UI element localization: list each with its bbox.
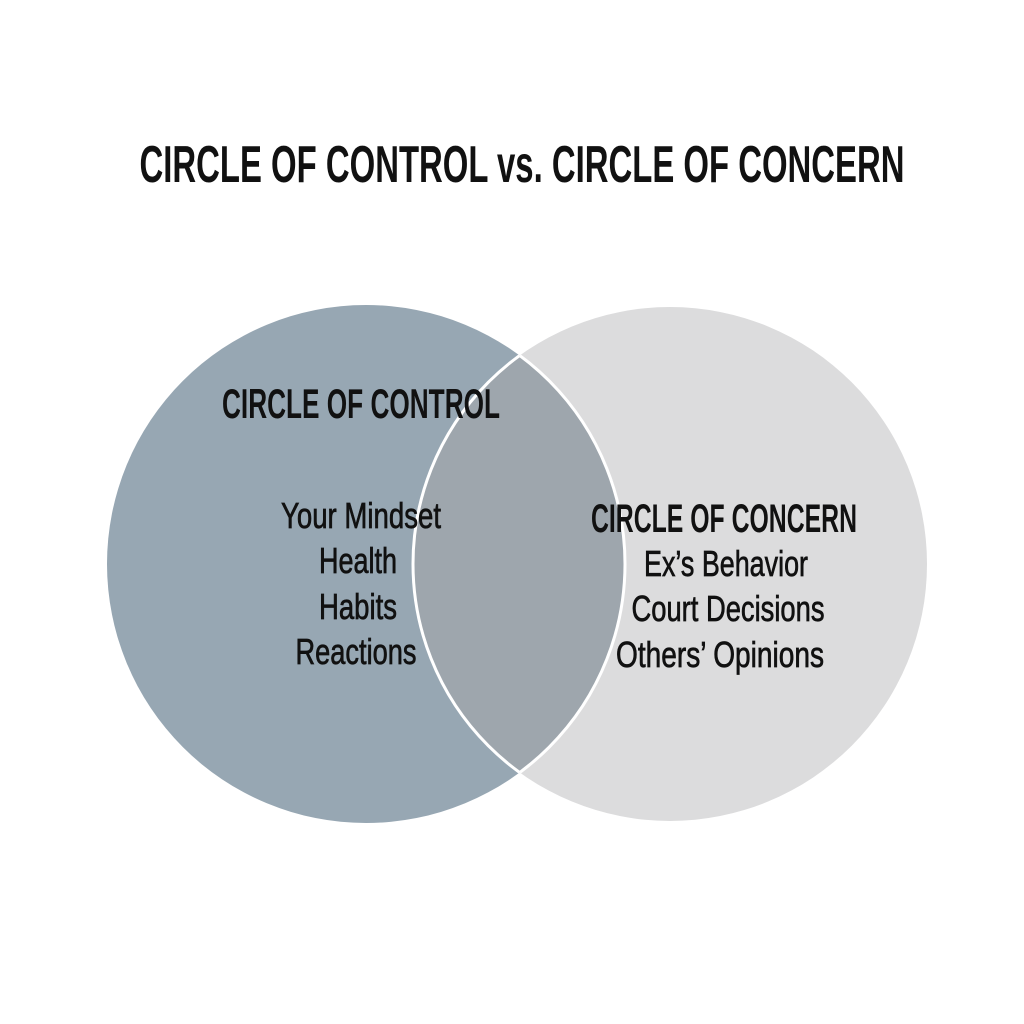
venn diagram [107, 305, 927, 823]
list: concern items: Court Decisions [632, 588, 824, 629]
list: control items: Reactions [296, 631, 416, 672]
list: concern items: Ex’s Behavior [644, 543, 808, 584]
circle: concern [413, 307, 927, 821]
list: concern items: Others’ Opinions [616, 634, 824, 675]
circle: control [107, 305, 625, 823]
overlap area [414, 358, 624, 770]
list: control items: Health [319, 540, 397, 581]
list: control items: Your Mindset [281, 495, 441, 536]
list: control items: Habits [319, 586, 397, 627]
list: control items [281, 495, 441, 672]
label: circle of control: CIRCLE OF CONTROL [222, 380, 500, 427]
label: circle of concern: CIRCLE OF CONCERN [591, 497, 857, 541]
list: concern items [616, 543, 824, 675]
